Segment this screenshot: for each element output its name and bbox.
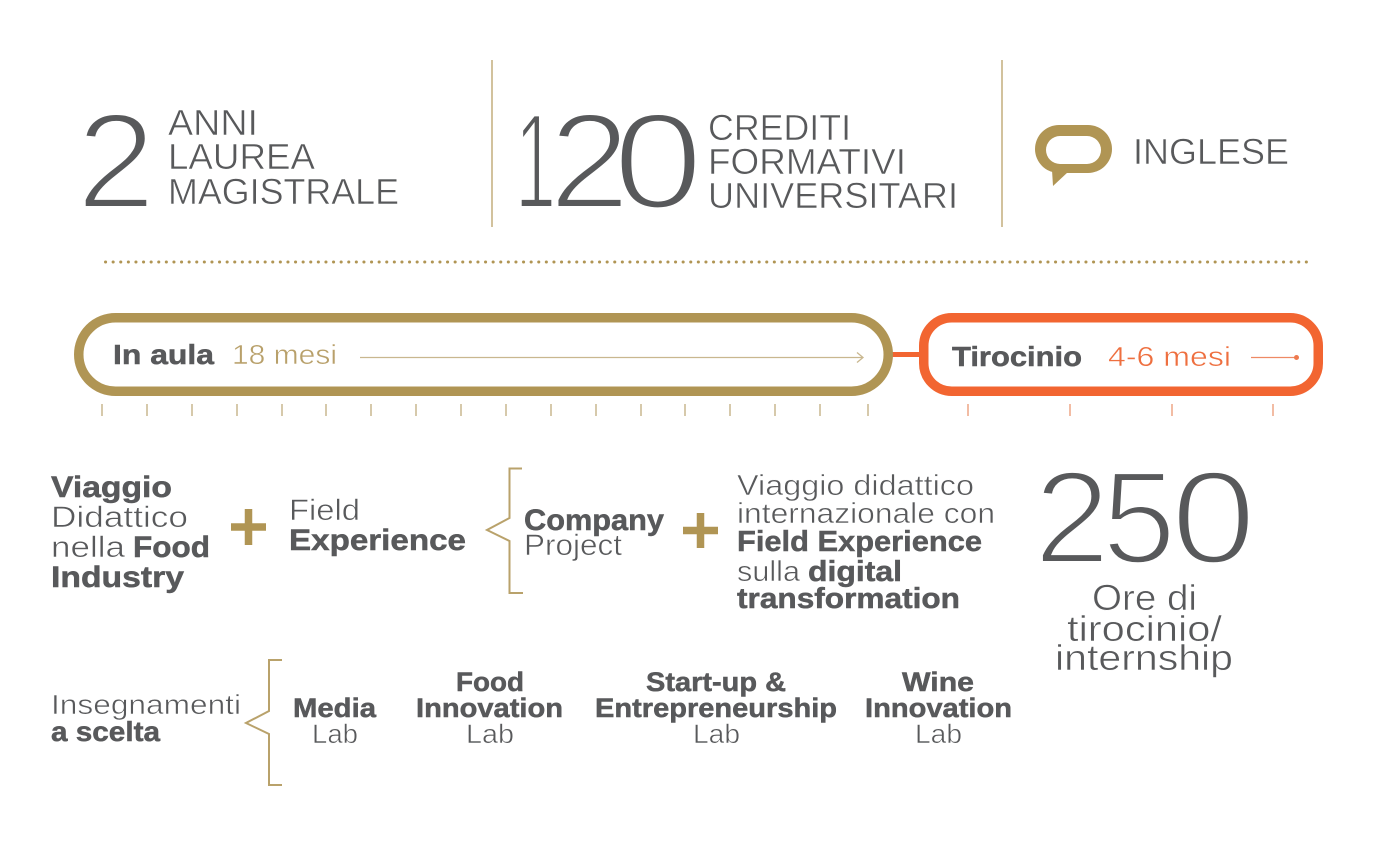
lab: food innovation: Innovation: [416, 693, 563, 723]
text: viaggio didattico food industry: Didattico: [51, 501, 188, 534]
ticks: in aula months: [102, 404, 868, 416]
lab: start-up and entrepreneurship: [595, 667, 837, 749]
stat: 2 anni laurea magistrale: ANNI: [168, 102, 258, 143]
timeline: [79, 318, 1318, 391]
text: viaggio didattico food industry: Viaggio: [51, 471, 172, 504]
panel: tirocinio: Tirocinio: [952, 341, 1082, 372]
stat: 2 anni laurea magistrale: 2: [76, 85, 156, 237]
text: field experience: [289, 494, 466, 557]
stat: 250 ore di tirocinio: 5: [1102, 444, 1176, 591]
stat: 120 crediti formativi universitari: FORMATIVI: [708, 141, 906, 182]
text: viaggio didattico food industry: nella: [51, 531, 125, 564]
text: viaggio didattico internazionale: sulla: [737, 556, 801, 588]
lab: food innovation: [416, 667, 563, 749]
lab: start-up and entrepreneurship: Lab: [693, 719, 740, 749]
stat: 120 crediti formativi universitari: 1: [515, 85, 556, 237]
icon: plus: [231, 509, 266, 545]
text: viaggio didattico internazionale: Viaggio didattico: [737, 470, 974, 502]
panel: tirocinio: 4-6 mesi: [1108, 341, 1231, 372]
lab: media: Media: [293, 693, 377, 723]
panel: in aula: 18 mesi: [232, 339, 337, 370]
lab: media: Lab: [312, 719, 358, 749]
text: company project: [524, 504, 664, 562]
stat: 250 ore di tirocinio: internship: [1055, 637, 1233, 678]
text: field experience: Field: [289, 494, 360, 527]
stat: 250 ore di tirocinio: 0: [1171, 444, 1256, 591]
text: insegnamenti a scelta: a scelta: [51, 716, 160, 747]
text: viaggio didattico internazionale: [737, 470, 995, 615]
icon: speech bubble: [1035, 125, 1112, 186]
stat: 250 ore di tirocinio: Ore di: [1092, 577, 1197, 618]
text: insegnamenti a scelta: Insegnamenti: [51, 689, 241, 720]
stat: 120 crediti formativi universitari: 2: [549, 85, 630, 237]
text: viaggio didattico food industry: [51, 471, 210, 594]
lab: wine innovation: Innovation: [865, 693, 1012, 723]
stat: 2 anni laurea magistrale: MAGISTRALE: [168, 171, 399, 212]
text: viaggio didattico internazionale: transformation: [737, 583, 960, 615]
text: viaggio didattico internazionale: internazionale con: [737, 498, 995, 530]
lab: start-up and entrepreneurship: Entrepreneurship: [595, 693, 837, 723]
lab: wine innovation: Lab: [915, 719, 962, 749]
lab: start-up and entrepreneurship: Start-up &: [646, 667, 786, 697]
text: field experience: Experience: [289, 524, 466, 557]
icon: plus: [683, 513, 718, 548]
text: viaggio didattico internazionale: Field Experience: [737, 526, 982, 558]
panel: tirocinio: [924, 318, 1318, 391]
lab: wine innovation: [865, 667, 1012, 749]
lab: food innovation: Lab: [466, 719, 514, 749]
text: insegnamenti a scelta: [51, 689, 241, 747]
brace: labs: [246, 660, 282, 785]
stat: 120 crediti formativi universitari: CREDITI: [708, 107, 851, 148]
stat: inglese: INGLESE: [1133, 131, 1289, 172]
text: viaggio didattico internazionale: digital: [808, 556, 902, 588]
stat: 250 ore di tirocinio: [1034, 444, 1256, 678]
lab: wine innovation: Wine: [902, 667, 974, 697]
panel: in aula: [79, 318, 888, 391]
text: company project: Company: [524, 504, 664, 537]
panel: in aula: In aula: [113, 339, 214, 370]
ticks: tirocinio months: [968, 404, 1273, 416]
stat: 2 anni laurea magistrale: LAUREA: [168, 136, 315, 177]
stat: 120 crediti formativi universitari: UNIVERSITARI: [708, 175, 958, 216]
stat: 250 ore di tirocinio: tirocinio/: [1067, 608, 1222, 649]
text: viaggio didattico food industry: Food: [133, 531, 210, 564]
text: company project: Project: [524, 529, 623, 562]
stat: 250 ore di tirocinio: 2: [1034, 444, 1110, 591]
stat: 2 anni laurea magistrale: [76, 85, 399, 237]
lab: media: [293, 693, 377, 749]
brace: company project: [487, 468, 523, 593]
lab: food innovation: Food: [456, 667, 524, 697]
stat: 120 crediti formativi universitari: [515, 85, 958, 237]
text: viaggio didattico food industry: Industry: [51, 561, 184, 594]
stat: 120 crediti formativi universitari: 0: [613, 85, 703, 237]
connector: [890, 352, 922, 357]
